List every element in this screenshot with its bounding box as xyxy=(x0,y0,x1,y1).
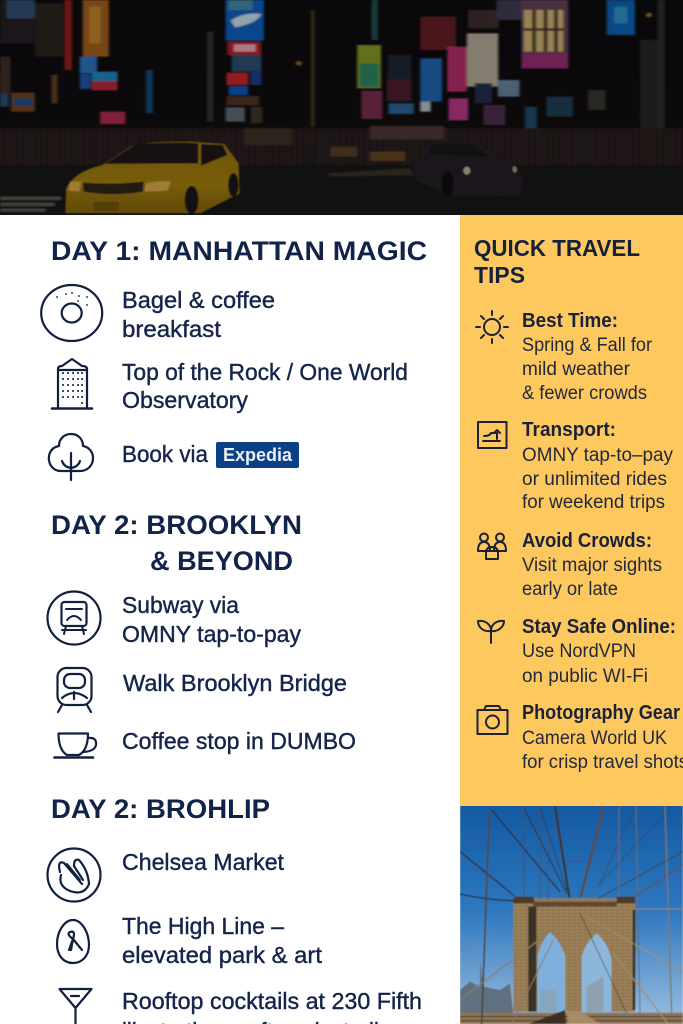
badge: Expedia xyxy=(216,442,299,468)
text: coffee stop: Coffee stop in DUMBO xyxy=(122,728,356,754)
tip: best time xyxy=(522,310,653,404)
tip: photography gear: Camera World UK xyxy=(522,728,667,749)
heading: day 2 Brohlip: DAY 2: BROHLIP xyxy=(51,794,270,824)
crowd band xyxy=(0,128,683,165)
icon: sun xyxy=(476,311,508,343)
tip: transport: Transport: xyxy=(522,419,616,441)
text: book via: Book via xyxy=(122,441,208,467)
text: subway: Subway via xyxy=(122,592,239,618)
tip: transport xyxy=(522,419,673,513)
cables xyxy=(460,807,683,1024)
tip: avoid crowds: Visit major sights xyxy=(522,555,662,576)
heading: day 1: DAY 1: MANHATTAN MAGIC xyxy=(51,236,427,266)
text: subway xyxy=(122,592,302,647)
walkway xyxy=(460,1013,683,1024)
icon: high line oval xyxy=(57,920,89,963)
heading: day 2 Brooklyn: DAY 2: BROOKLYN xyxy=(51,510,302,540)
badge: Expedia: Expedia xyxy=(223,445,293,465)
icon: seedling xyxy=(478,621,504,643)
text: bagel and coffee: Bagel & coffee xyxy=(122,287,275,313)
crosswalk xyxy=(327,168,414,177)
tip: best time: Best Time: xyxy=(522,310,618,332)
text: observatory: Observatory xyxy=(122,387,249,413)
heading: day 2 Brooklyn: & BEYOND xyxy=(150,546,293,576)
tip: best time: mild weather xyxy=(522,359,631,380)
tip: transport: or unlimited rides xyxy=(522,469,667,490)
icon: bagel xyxy=(41,285,102,341)
tip: transport: OMNY tap-to–pay xyxy=(522,445,673,466)
dark car xyxy=(413,141,523,197)
yellow taxi xyxy=(65,142,240,214)
text: observatory: Top of the Rock / One World xyxy=(122,359,408,385)
text: chelsea market: Chelsea Market xyxy=(122,849,285,875)
tip: stay safe online: Use NordVPN xyxy=(522,641,636,662)
icon: camera xyxy=(478,706,508,734)
text: walk bridge: Walk Brooklyn Bridge xyxy=(123,670,347,696)
tip: stay safe online: Stay Safe Online: xyxy=(522,616,676,638)
icon: cocktail glass xyxy=(60,989,92,1024)
panel: quick travel tips background xyxy=(460,215,683,806)
tip: avoid crowds: early or late xyxy=(522,579,618,600)
icon: subway in circle xyxy=(48,592,100,644)
photo dimming xyxy=(0,0,683,215)
tip: avoid crowds xyxy=(522,530,662,600)
tower xyxy=(513,898,635,1012)
icon: group of people xyxy=(478,534,506,559)
heading: quick travel tips: TIPS xyxy=(474,262,525,288)
tip: stay safe online: on public WI-Fi xyxy=(522,666,648,687)
tip: photography gear xyxy=(522,702,683,773)
photo: Brooklyn Bridge xyxy=(460,800,683,1024)
tip: best time: & fewer crowds xyxy=(522,383,647,404)
icon: tree xyxy=(49,434,93,480)
icon: train xyxy=(58,668,92,712)
text: observatory xyxy=(122,359,408,413)
tip: stay safe online xyxy=(522,616,676,687)
heading: day 2 Brooklyn xyxy=(51,510,302,576)
text: rooftop cocktails: Rooftop cocktails at 230 Fifth xyxy=(122,988,422,1014)
icon: skyscraper xyxy=(52,359,92,408)
tip: avoid crowds: Avoid Crowds: xyxy=(522,530,652,552)
text: high line xyxy=(122,913,323,968)
icon: market swirl in circle xyxy=(48,848,100,902)
tip: best time: Spring & Fall for xyxy=(522,335,653,356)
tip: transport: for weekend trips xyxy=(522,492,665,513)
text: bagel and coffee xyxy=(122,287,275,342)
ground xyxy=(1,196,62,206)
text: subway: OMNY tap-to-pay xyxy=(122,621,302,647)
text: high line: elevated park & art xyxy=(122,942,323,968)
icon: transport card xyxy=(478,422,506,448)
icon: coffee cup xyxy=(54,734,96,758)
heading: quick travel tips: QUICK TRAVEL xyxy=(474,235,640,261)
heading: quick travel tips xyxy=(474,235,640,288)
text: high line: The High Line – xyxy=(122,913,284,939)
text: bagel and coffee: breakfast xyxy=(122,316,222,342)
hero photo: Times Square at night with taxi xyxy=(0,0,683,215)
